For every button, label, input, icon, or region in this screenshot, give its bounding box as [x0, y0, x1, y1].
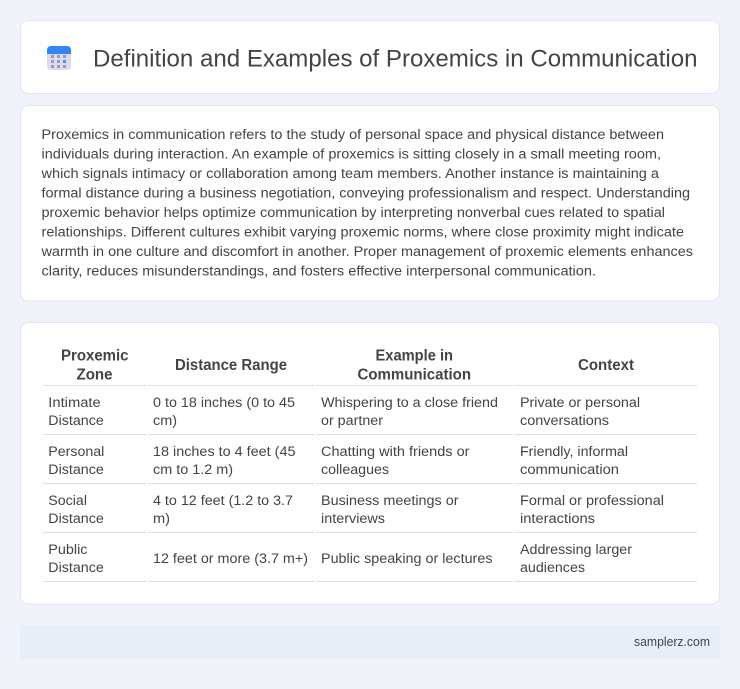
footer: source: samplerz.com	[634, 634, 710, 649]
table header row: Context	[578, 357, 635, 374]
table row: intimate distance: 0 to 18 inches (0 to 45	[153, 395, 295, 411]
text block: description	[40, 127, 693, 280]
text block: description: clarity, reduces misunderstandings, and fosters effective interpersonal communication.	[42, 264, 596, 280]
table row: intimate distance: conversations	[520, 413, 609, 429]
table row: personal distance: Distance	[48, 462, 104, 478]
table row: social distance: Social	[48, 493, 87, 509]
table row: social distance: interactions	[520, 511, 595, 527]
table row: intimate distance: cm)	[153, 413, 177, 429]
text block: description: Proxemics in communication refers to the study of personal space and physical distance between	[42, 127, 664, 143]
table row: personal distance: cm to 1.2 m)	[153, 462, 233, 478]
text block: description: proxemic behavior helps optimize communication by interpreting nonverbal cues related to spatial	[42, 205, 665, 221]
table header row: Proxemic	[61, 348, 129, 364]
text block: description: relationships. Different cultures exhibit varying proxemic norms, where close proximity might indicate	[42, 224, 684, 240]
table row: social distance: Distance	[48, 511, 104, 527]
table header row: Communication	[358, 366, 471, 384]
table row: social distance: m)	[153, 511, 170, 527]
table row: personal distance: 18 inches to 4 feet (45	[153, 444, 296, 460]
table row: personal distance: colleagues	[321, 462, 389, 478]
table rules	[43, 386, 697, 582]
panel: title card	[20, 20, 720, 94]
table header row	[61, 348, 635, 384]
icon: calendar	[47, 46, 71, 70]
table row: personal distance: Personal	[48, 444, 104, 460]
table row: intimate distance: Distance	[48, 413, 104, 429]
table header row: Example in	[376, 348, 453, 364]
table row: social distance: Business meetings or	[321, 493, 459, 509]
text block: description: individuals during interaction. An example of proxemics is sitting closely in a small meeting room,	[42, 146, 661, 162]
text block: description: which signals intimacy or collaboration among team members. Another instance is maintaining a	[40, 166, 659, 182]
table row: social distance	[48, 493, 664, 527]
table row: personal distance: Friendly, informal	[520, 444, 628, 460]
table row: public distance: 12 feet or more (3.7 m+)	[153, 551, 308, 567]
table row: public distance: Distance	[48, 560, 104, 576]
table row: personal distance: communication	[520, 462, 619, 478]
table row: public distance: Public	[48, 542, 88, 558]
text block: description: warmth in one culture and discomfort in another. Proper management of proxemic elements enhances	[40, 244, 693, 260]
table row: social distance: Formal or professional	[520, 493, 664, 509]
table row: personal distance: Chatting with friends or	[321, 444, 470, 460]
table row: intimate distance: Whispering to a close friend	[321, 395, 498, 411]
title: Definition and Examples of Proxemics in Communication	[93, 46, 698, 72]
table header row: Zone	[76, 366, 113, 384]
table row: public distance: Addressing larger	[520, 542, 632, 558]
panel: description card	[20, 106, 720, 301]
footer bar	[20, 625, 720, 658]
table row: intimate distance	[48, 395, 640, 429]
table row: intimate distance: Intimate	[48, 395, 101, 411]
table row: public distance: Public speaking or lectures	[321, 551, 492, 567]
table row: personal distance	[48, 444, 628, 478]
table header row: Distance Range	[175, 357, 287, 374]
table row: social distance: 4 to 12 feet (1.2 to 3.7	[153, 493, 293, 509]
table row: intimate distance: or partner	[321, 413, 383, 429]
table row: public distance	[48, 542, 632, 576]
table row: social distance: interviews	[321, 511, 385, 527]
table row: public distance: audiences	[520, 560, 585, 576]
text block: description: formal distance during a business negotiation, conveying professionalism and respect. Understanding	[42, 186, 690, 202]
table row: intimate distance: Private or personal	[520, 395, 640, 411]
panel: table card	[20, 322, 720, 604]
